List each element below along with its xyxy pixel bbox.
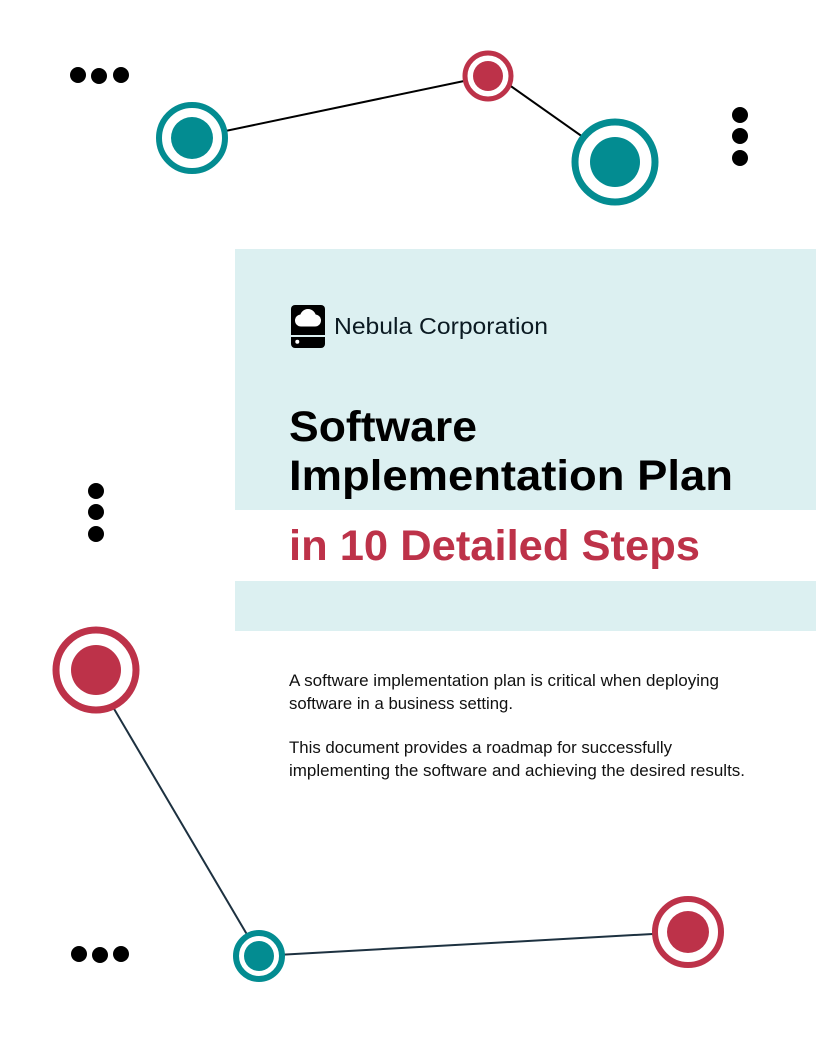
text block: introduction: software in a business setting. <box>289 695 513 713</box>
heading: main title <box>289 403 733 500</box>
icon: dots top right <box>732 107 748 166</box>
network diagram: top <box>159 53 655 202</box>
network diagram: bottom <box>56 630 721 979</box>
icon: dots bottom left <box>71 946 129 963</box>
icon: cloud server logo <box>291 305 325 348</box>
heading: main title: Implementation Plan <box>289 452 733 500</box>
icon: dots top left <box>70 67 129 84</box>
text block: introduction: implementing the software and achieving the desired results. <box>289 762 745 780</box>
text block: introduction: This document provides a roadmap for successfully <box>289 739 673 757</box>
text block: introduction: A software implementation plan is critical when deploying <box>289 672 719 690</box>
panel: title background <box>235 249 816 631</box>
icon: dots middle left <box>88 483 104 542</box>
heading: main title: Software <box>289 403 477 451</box>
text block: introduction <box>289 672 745 780</box>
heading: subtitle: in 10 Detailed Steps <box>289 522 700 570</box>
company name: Nebula Corporation <box>334 313 548 339</box>
